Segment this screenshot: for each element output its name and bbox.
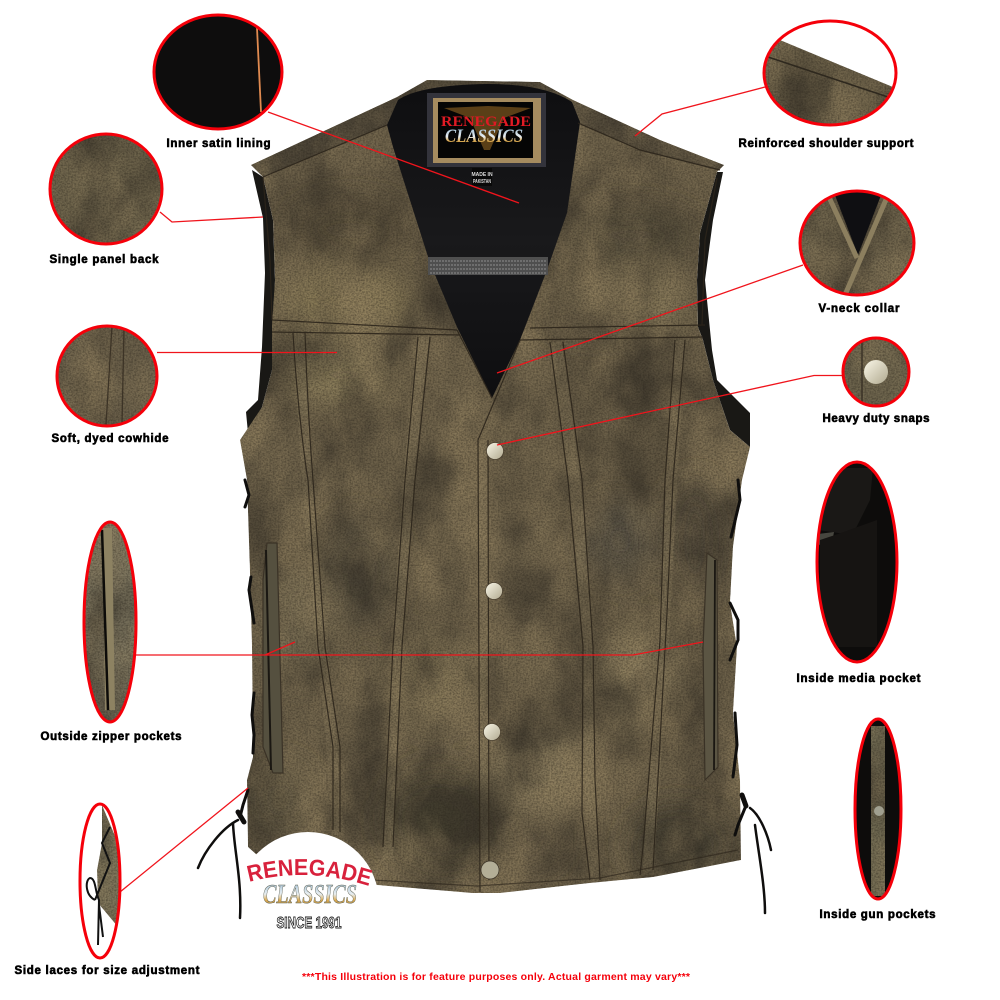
seams [255, 123, 738, 892]
callout: soft dyed cowhide: Soft, dyed cowhide [52, 433, 168, 445]
brand neck label [427, 93, 546, 167]
back panel behind vest [246, 170, 750, 447]
disclaimer: ***This Illustration is for feature purposes only. Actual garment may vary*** [302, 971, 691, 983]
callout: outside zipper pockets [40, 522, 182, 743]
white logo badge: SINCE 1991 [276, 915, 342, 932]
callout: inner satin lining [154, 15, 282, 150]
strap on shoulders [251, 80, 724, 177]
callout: v-neck collar [800, 190, 914, 315]
white logo badge: CLASSICS [263, 879, 357, 909]
white logo badge [246, 832, 377, 932]
callout: soft dyed cowhide [52, 326, 168, 445]
snaps [481, 442, 504, 879]
callout: inside gun pockets [820, 719, 936, 921]
callout: reinforced shoulder support [738, 21, 914, 150]
callout lines [120, 87, 843, 892]
vest [230, 70, 760, 910]
neck tape [428, 257, 548, 275]
callout: outside zipper pockets: Outside zipper pockets [40, 731, 182, 743]
callout: inside media pocket: Inside media pocket [796, 673, 921, 685]
side laces [198, 480, 771, 918]
lining [387, 84, 580, 398]
callout: single panel back [50, 134, 162, 266]
brand neck label: CLASSICS [445, 126, 523, 147]
made in tag [471, 168, 493, 186]
lighter seam bands [300, 333, 680, 892]
callout: side laces: Side laces for size adjustment [14, 965, 200, 977]
callout: inside gun pockets: Inside gun pockets [820, 909, 936, 921]
callout: side laces [14, 804, 200, 977]
callout: heavy duty snaps [822, 338, 930, 425]
vest body [230, 70, 760, 910]
brand neck label: RENEGADE [441, 114, 531, 130]
callout: v-neck collar: V-neck collar [818, 303, 900, 315]
callout: inside media pocket [796, 462, 921, 685]
callout: inner satin lining: Inner satin lining [166, 138, 270, 150]
callout: reinforced shoulder support: Reinforced shoulder support [738, 138, 914, 150]
white logo badge: RENEGADE [246, 859, 372, 886]
made in tag: PAKISTAN [473, 179, 491, 185]
callout: heavy duty snaps: Heavy duty snaps [822, 413, 930, 425]
made in tag: MADE IN [471, 172, 493, 178]
zipper pockets [263, 543, 718, 780]
callout: single panel back: Single panel back [50, 254, 159, 266]
light and dark leather patches [245, 200, 735, 885]
